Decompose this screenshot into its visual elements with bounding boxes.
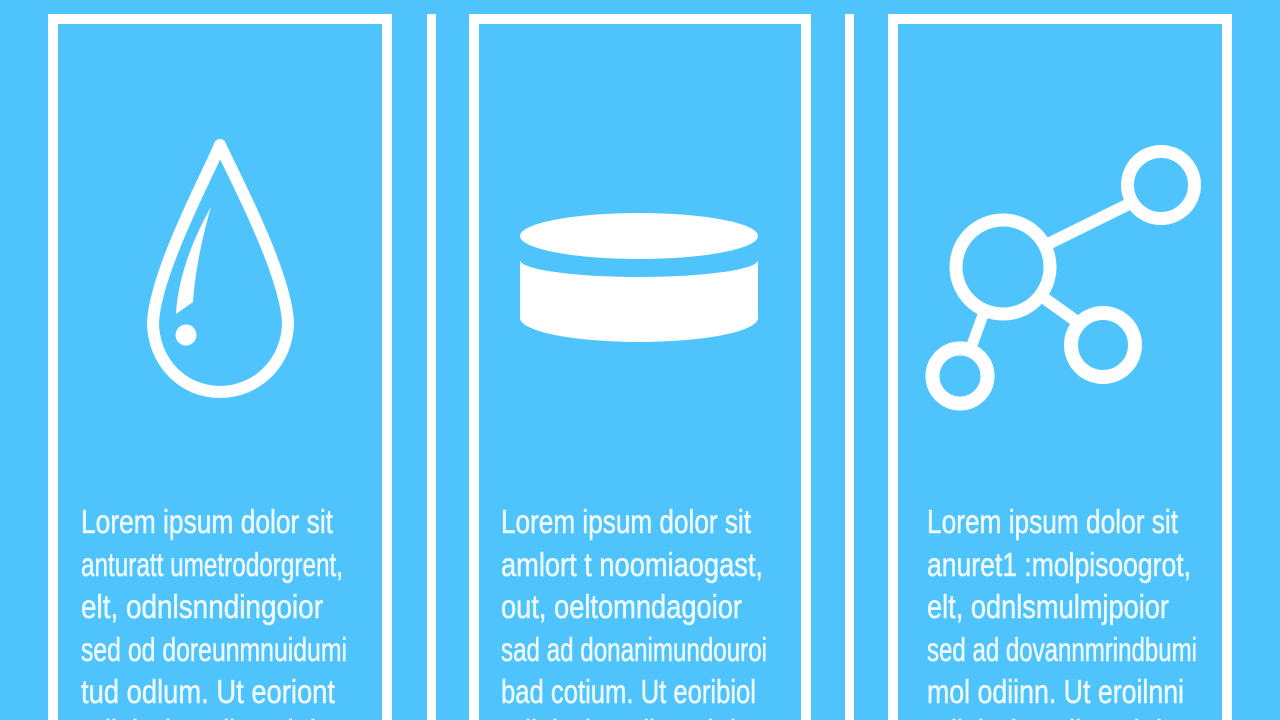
text block: right: elt, odnlsmulmjpoior	[927, 588, 1169, 625]
text block: left: elt, odnlsnndingoior	[81, 588, 323, 625]
text block: left: anturatt umetrodorgrent,	[81, 546, 343, 583]
text block: right: Lorem ipsum dolor sit	[927, 503, 1178, 540]
panel: cylinder	[474, 19, 806, 720]
text block: middle: sad ad donanimundouroi	[501, 631, 767, 668]
text block: middle: bad cotium. Ut eoribiol	[501, 673, 756, 710]
icon: cylinder	[520, 213, 758, 342]
text block: middle: Lorem ipsum dolor sit	[501, 503, 751, 540]
panel frame: right	[893, 19, 1227, 720]
panel: water drop	[53, 19, 387, 720]
text block: middle: amlort t noomiaogast,	[501, 546, 763, 583]
divider: left	[427, 14, 436, 720]
text block: middle: out, oeltomndagoior	[501, 588, 742, 625]
panel frame: middle	[474, 19, 806, 720]
text block: right: mol odiinn. Ut eroilnni	[927, 673, 1184, 710]
text block: right: anuret1 :molpisoogrot,	[927, 546, 1191, 583]
text block: right	[927, 503, 1197, 720]
text block: left	[81, 503, 347, 720]
panel: network	[893, 19, 1227, 720]
divider: right	[845, 14, 854, 720]
panel frame: left	[53, 19, 387, 720]
text block: middle	[501, 503, 767, 720]
icon: network nodes	[932, 152, 1194, 404]
icon: water drop	[153, 145, 288, 392]
text block: left: tud odlum. Ut eoriont	[81, 673, 335, 710]
text block: left: Lorem ipsum dolor sit	[81, 503, 333, 540]
text block: left: sed od doreunmnuidumi	[81, 631, 347, 668]
